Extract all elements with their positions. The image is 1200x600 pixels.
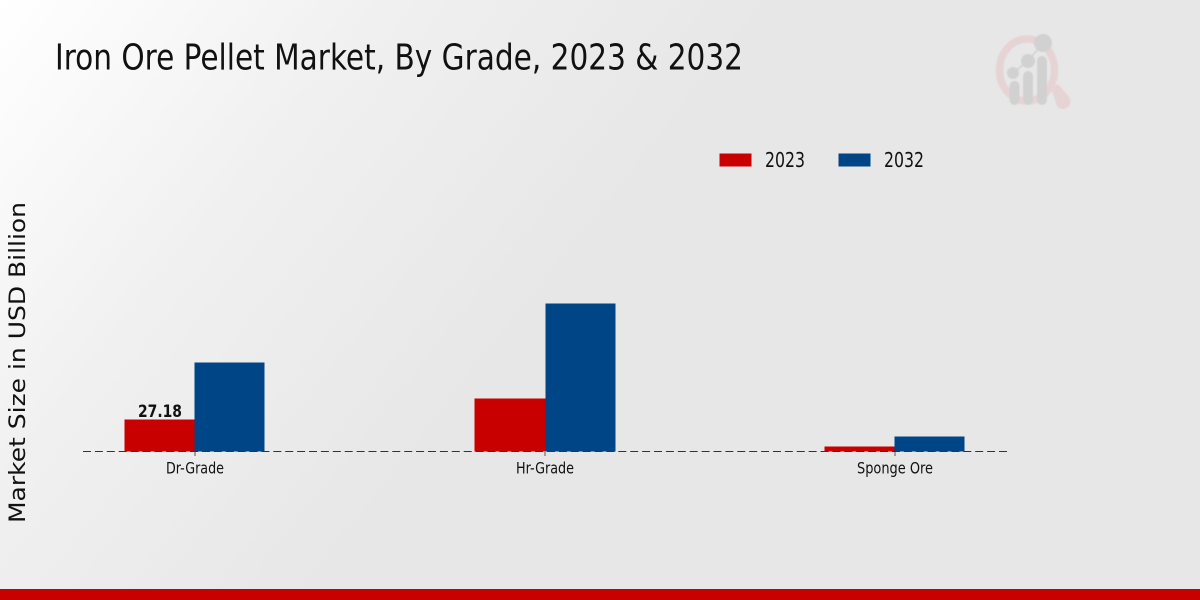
bar: Sponge Ore 2032 bbox=[894, 436, 964, 452]
bar: Sponge Ore 2023 bbox=[824, 446, 894, 452]
y axis label: Market Size in USD Billion bbox=[5, 202, 31, 523]
legend label: 2023: 2023 bbox=[765, 148, 805, 172]
bar: Dr-Grade 2032 bbox=[194, 362, 264, 452]
legend swatch: 2023 bbox=[720, 154, 752, 166]
footer bar bbox=[0, 589, 1200, 600]
bar: Hr-Grade 2032 bbox=[546, 304, 616, 452]
bar chart bbox=[83, 304, 1007, 478]
legend bbox=[720, 148, 924, 172]
title: Iron Ore Pellet Market, By Grade, 2023 & 2032 bbox=[55, 37, 743, 78]
legend label: 2032: 2032 bbox=[884, 148, 924, 172]
bar: Hr-Grade 2023 bbox=[474, 398, 546, 452]
category label: Hr-Grade: Hr-Grade bbox=[516, 458, 574, 478]
category label: Dr-Grade: Dr-Grade bbox=[166, 458, 224, 478]
icon: magnifier logo watermark bbox=[1000, 34, 1070, 109]
tick marks bbox=[195, 452, 895, 456]
legend swatch: 2032 bbox=[838, 154, 870, 166]
x axis baseline bbox=[83, 450, 1007, 452]
category label: Sponge Ore: Sponge Ore bbox=[857, 458, 933, 478]
data label: 27.18: 27.18 bbox=[138, 402, 182, 421]
bar: Dr-Grade 2023 bbox=[124, 420, 194, 452]
